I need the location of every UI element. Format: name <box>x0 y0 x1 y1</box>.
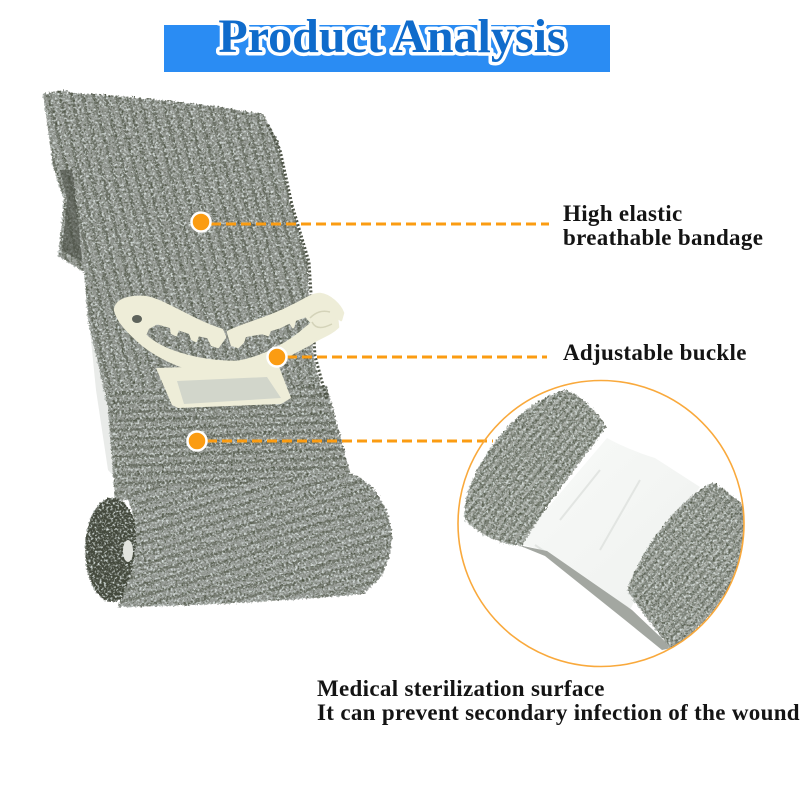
dashed leader <box>287 356 547 358</box>
callout: buckle <box>268 340 747 366</box>
pad lower edge <box>518 545 672 650</box>
marker dot <box>192 212 210 232</box>
roll core <box>123 540 133 562</box>
caption: sterilization surface <box>317 676 800 725</box>
right roll <box>627 482 748 650</box>
label text: breathable bandage <box>563 225 763 250</box>
label text <box>563 201 763 250</box>
buckle base <box>156 364 291 408</box>
title banner <box>164 10 610 72</box>
bandage roll <box>118 474 392 607</box>
bandage fold on left <box>43 90 87 274</box>
banner background <box>164 25 610 72</box>
dashed leader <box>207 440 493 442</box>
bandage lower ribbing <box>104 385 355 500</box>
marker dot <box>188 432 206 450</box>
buckle right hook detail <box>310 311 332 328</box>
callout: sterile surface leader <box>188 432 493 450</box>
label text: Adjustable buckle <box>563 340 747 365</box>
buckle base window <box>177 377 281 404</box>
plastic buckle <box>115 294 343 408</box>
white backing pad edge <box>84 270 125 485</box>
dark roll end <box>85 498 139 602</box>
marker dot <box>268 348 286 366</box>
buckle arc and arms <box>115 294 343 375</box>
caption: sterilization surface: Medical sterilization surface <box>317 676 605 701</box>
detail circle: opened bandage <box>458 380 748 666</box>
left roll <box>464 390 606 546</box>
caption: sterilization surface: It can prevent secondary infection of the wound <box>317 700 800 725</box>
buckle left hole <box>132 315 142 323</box>
fold dark crease <box>60 170 82 262</box>
orange circle outline <box>458 380 744 666</box>
callout: bandage <box>192 201 763 250</box>
pad fold lines <box>535 470 640 608</box>
dashed leader <box>211 222 549 226</box>
bandage upper body <box>62 92 355 500</box>
dark edge of bandage <box>268 125 327 400</box>
sterile white pad <box>518 438 700 610</box>
label text: High elastic <box>563 201 682 226</box>
title text: Product Analysis <box>218 10 566 63</box>
product photo: bandage with buckle <box>43 90 392 607</box>
